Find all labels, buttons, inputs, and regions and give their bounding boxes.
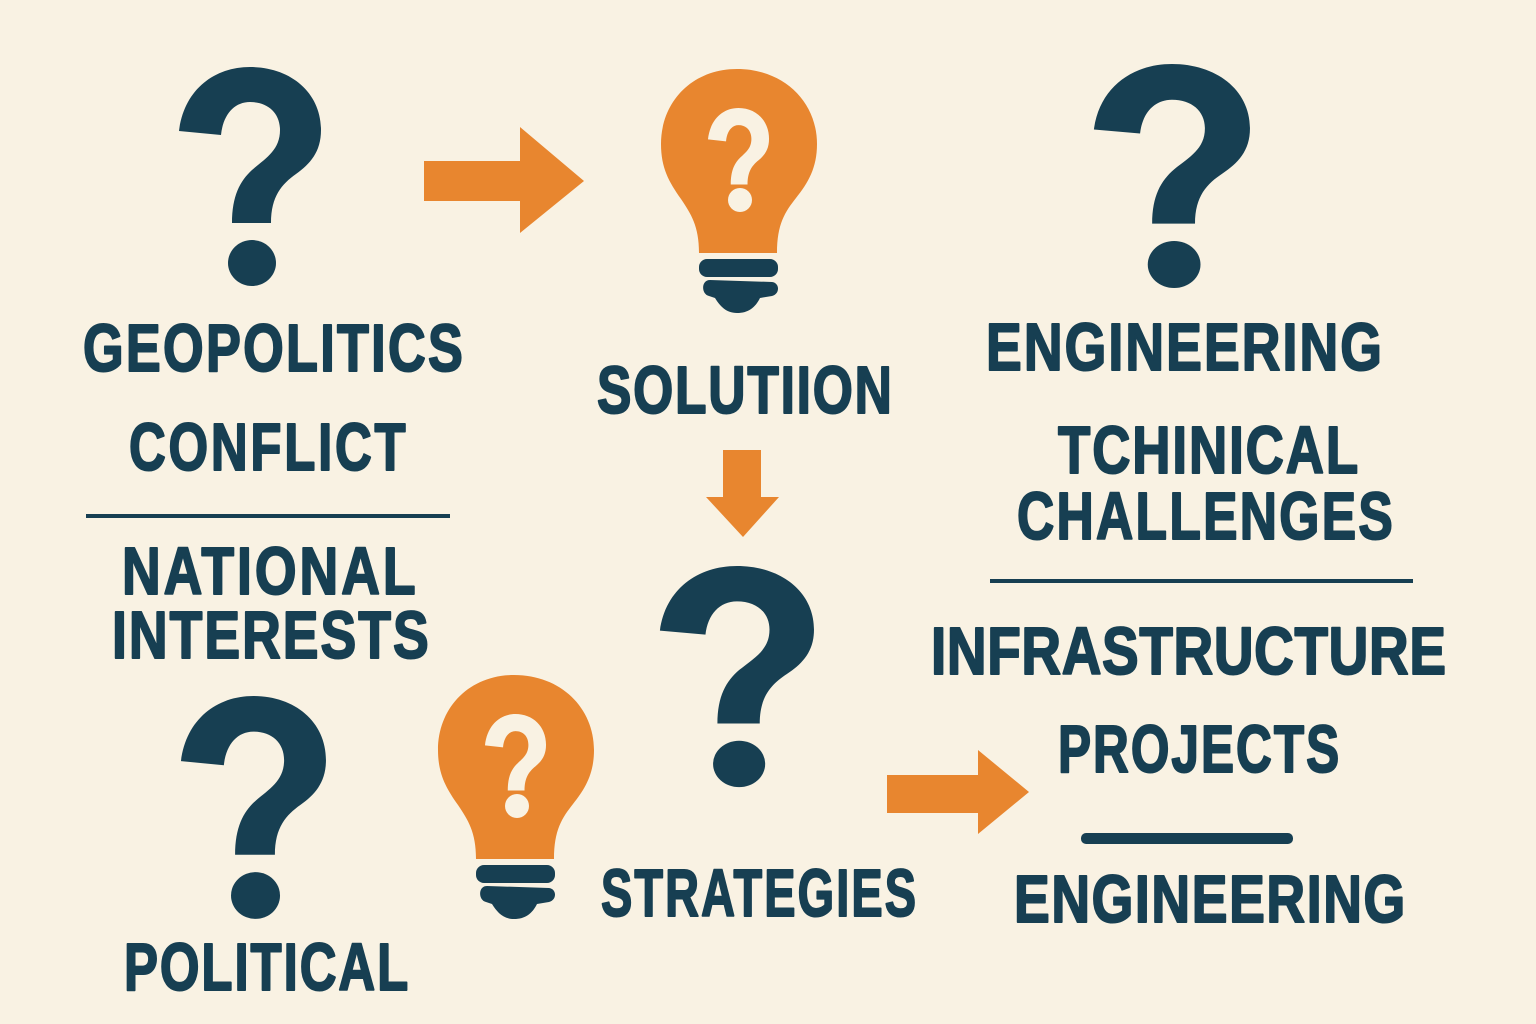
heading: political: POLITICAL (124, 929, 408, 1005)
divider: left (86, 514, 450, 518)
heading: challenges: CHALLENGES (1017, 478, 1393, 554)
icon: question mark center (660, 566, 814, 787)
icon: question mark top left (179, 67, 321, 286)
icon: light bulb bottom (438, 675, 594, 919)
heading: projects: PROJECTS (1058, 713, 1339, 787)
heading: engineering top: ENGINEERING (986, 309, 1382, 384)
heading: engineering bottom: ENGINEERING (1014, 861, 1405, 936)
icon: question mark top right (1094, 64, 1250, 288)
icon: light bulb top (661, 69, 817, 313)
heading: infrastructure: INFRASTRUCTURE (931, 614, 1446, 688)
heading: strategies: STRATEGIES (601, 857, 916, 931)
divider: lower right (1081, 833, 1293, 844)
heading: interests: INTERESTS (112, 597, 429, 672)
heading: national: NATIONAL (122, 533, 416, 608)
arrow: to projects (887, 750, 1029, 834)
arrow: down to strategies (706, 450, 779, 537)
heading: geopolitics: GEOPOLITICS (83, 311, 463, 385)
heading: conflict: CONFLICT (129, 409, 406, 485)
heading: solution: SOLUTIION (597, 352, 892, 428)
divider: right (990, 579, 1413, 583)
arrow: to solution (424, 127, 584, 233)
icon: question mark bottom left (181, 696, 326, 919)
heading: technical: TCHINICAL (1058, 412, 1358, 487)
